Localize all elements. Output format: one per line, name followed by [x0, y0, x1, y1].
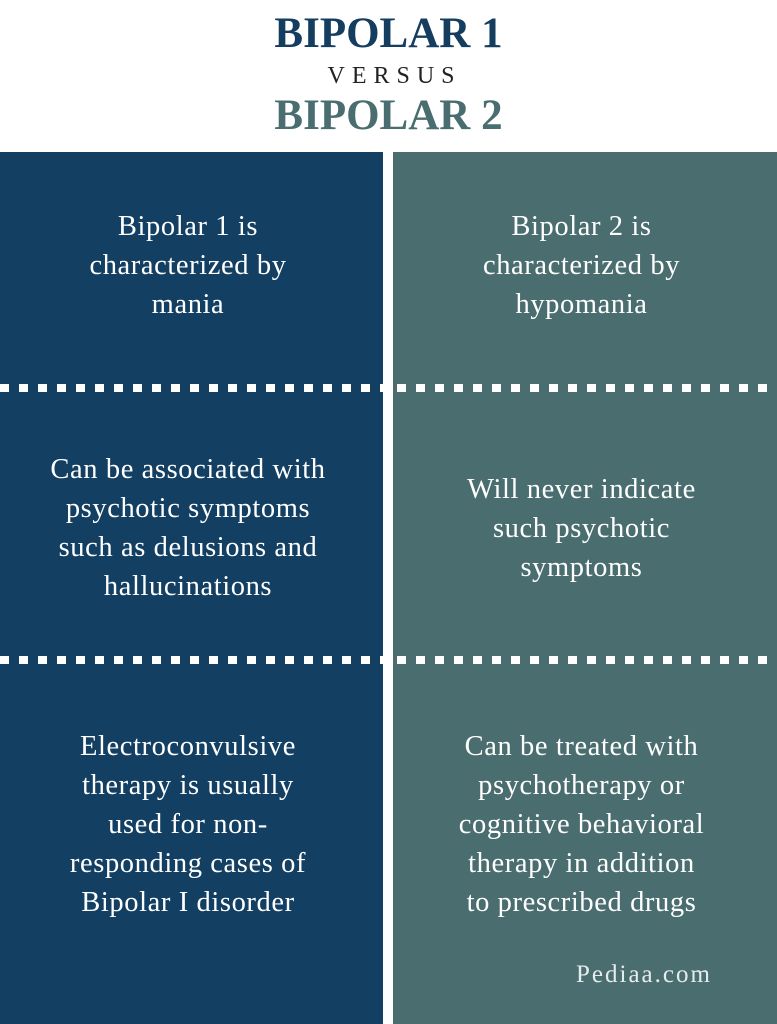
heading: bipolar 2: BIPOLAR 2 — [274, 92, 503, 139]
text: bipolar 2 psychotic: symptoms — [520, 552, 642, 582]
text: bipolar 1 mania: mania — [152, 288, 224, 320]
text: bipolar 1 mania: characterized by — [89, 250, 287, 280]
text: bipolar 1 treatment: therapy is usually — [82, 770, 294, 800]
text: bipolar 1 treatment: Electroconvulsive — [80, 730, 296, 762]
text: bipolar 2 hypomania: Bipolar 2 is — [511, 210, 652, 242]
title — [274, 10, 503, 139]
text: bipolar 2 psychotic: Will never indicate — [467, 474, 696, 504]
text: bipolar 2 treatment: psychotherapy or — [478, 770, 685, 800]
text: bipolar 2 treatment: Can be treated with — [465, 730, 698, 762]
text: bipolar 1 psychotic: psychotic symptoms — [66, 493, 310, 524]
panel: bipolar 1 column — [0, 152, 383, 1024]
text: bipolar 1 mania: Bipolar 1 is — [118, 210, 258, 242]
heading: bipolar 1: BIPOLAR 1 — [274, 10, 503, 57]
text: bipolar 2 treatment: to prescribed drugs — [467, 886, 696, 918]
text: bipolar 1 psychotic: hallucinations — [104, 571, 272, 602]
text: bipolar 1 psychotic: Can be associated with — [50, 454, 326, 485]
text: bipolar 1 treatment: responding cases of — [70, 848, 306, 878]
text: bipolar 2 psychotic — [467, 474, 696, 582]
text: bipolar 2 treatment — [459, 730, 704, 918]
text: bipolar 2 hypomania — [483, 210, 680, 320]
text: bipolar 1 psychotic: such as delusions and — [59, 532, 317, 563]
text: bipolar 1 psychotic — [50, 454, 326, 602]
panel: bipolar 2 column — [393, 152, 777, 1024]
heading: versus: VERSUS — [327, 63, 462, 89]
text: bipolar 2 treatment: cognitive behavioral — [459, 808, 704, 840]
text: bipolar 2 hypomania: hypomania — [515, 288, 648, 320]
text: bipolar 1 treatment: used for non- — [108, 808, 268, 840]
logo: pediaa.com: Pediaa.com — [576, 961, 712, 988]
text: bipolar 2 psychotic: such psychotic — [493, 512, 670, 544]
text: bipolar 1 mania — [89, 210, 287, 320]
text: bipolar 2 hypomania: characterized by — [483, 250, 680, 280]
text: bipolar 1 treatment: Bipolar I disorder — [81, 886, 295, 918]
text: bipolar 1 treatment — [70, 730, 306, 918]
text: bipolar 2 treatment: therapy in addition — [468, 848, 695, 878]
